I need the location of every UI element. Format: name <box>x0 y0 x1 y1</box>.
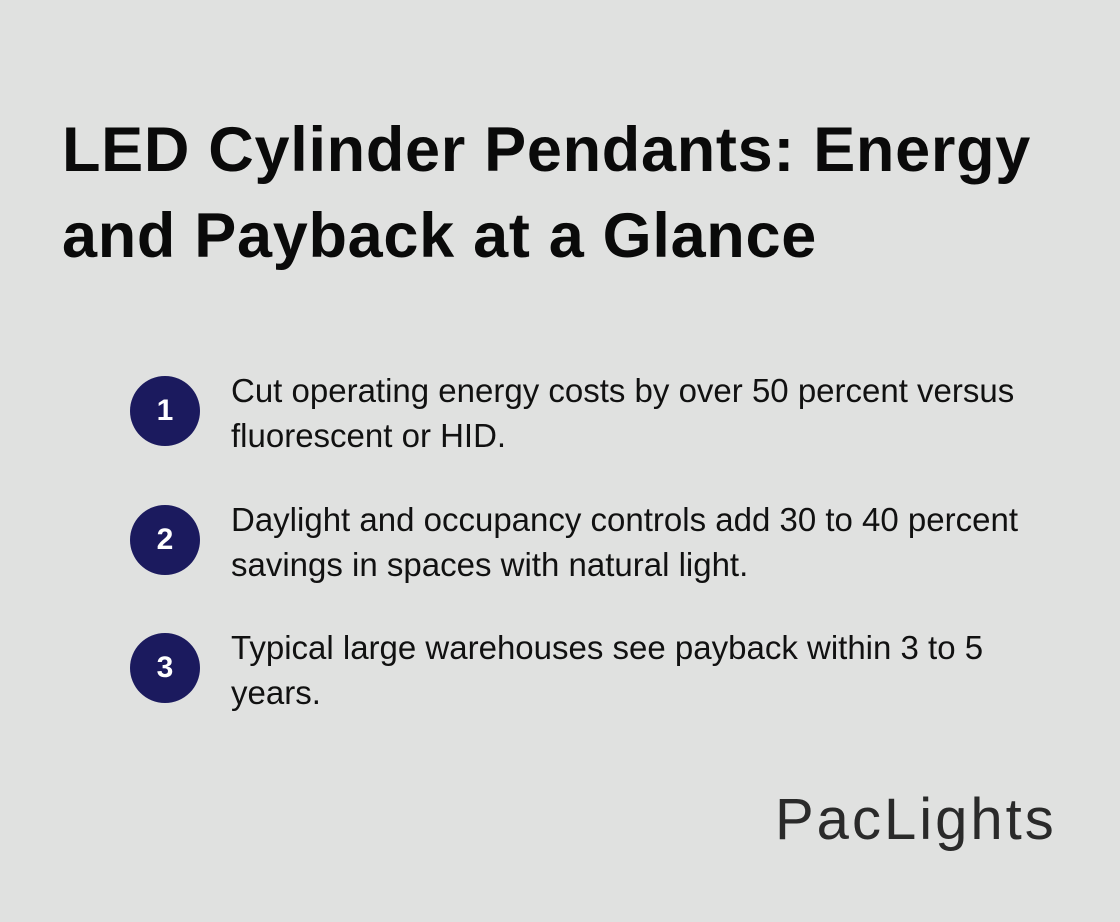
item 3 <box>130 629 983 711</box>
text 2: Daylight and occupancy controls add 30 to 40 percent <box>231 501 1018 538</box>
text 1: fluorescent or HID. <box>231 417 506 454</box>
text 2: savings in spaces with natural light. <box>231 546 748 583</box>
title: and Payback at a Glance <box>62 201 817 271</box>
badge 1: 1 <box>157 394 173 427</box>
text 3 <box>231 629 983 711</box>
badge 2: 2 <box>157 523 173 556</box>
badge 2 <box>130 505 200 575</box>
text 3: Typical large warehouses see payback within 3 to 5 <box>231 629 983 666</box>
item 2 <box>130 501 1018 583</box>
title: LED Cylinder Pendants: Energy <box>62 115 1031 185</box>
logo: PacLights <box>775 787 1057 852</box>
badge 3: 3 <box>157 651 173 684</box>
item 1 <box>130 372 1014 454</box>
title <box>62 115 1031 271</box>
text 1: Cut operating energy costs by over 50 percent versus <box>231 372 1014 409</box>
text 2 <box>231 501 1018 583</box>
text 3: years. <box>231 674 321 711</box>
text 1 <box>231 372 1014 454</box>
badge 3 <box>130 633 200 703</box>
badge 1 <box>130 376 200 446</box>
